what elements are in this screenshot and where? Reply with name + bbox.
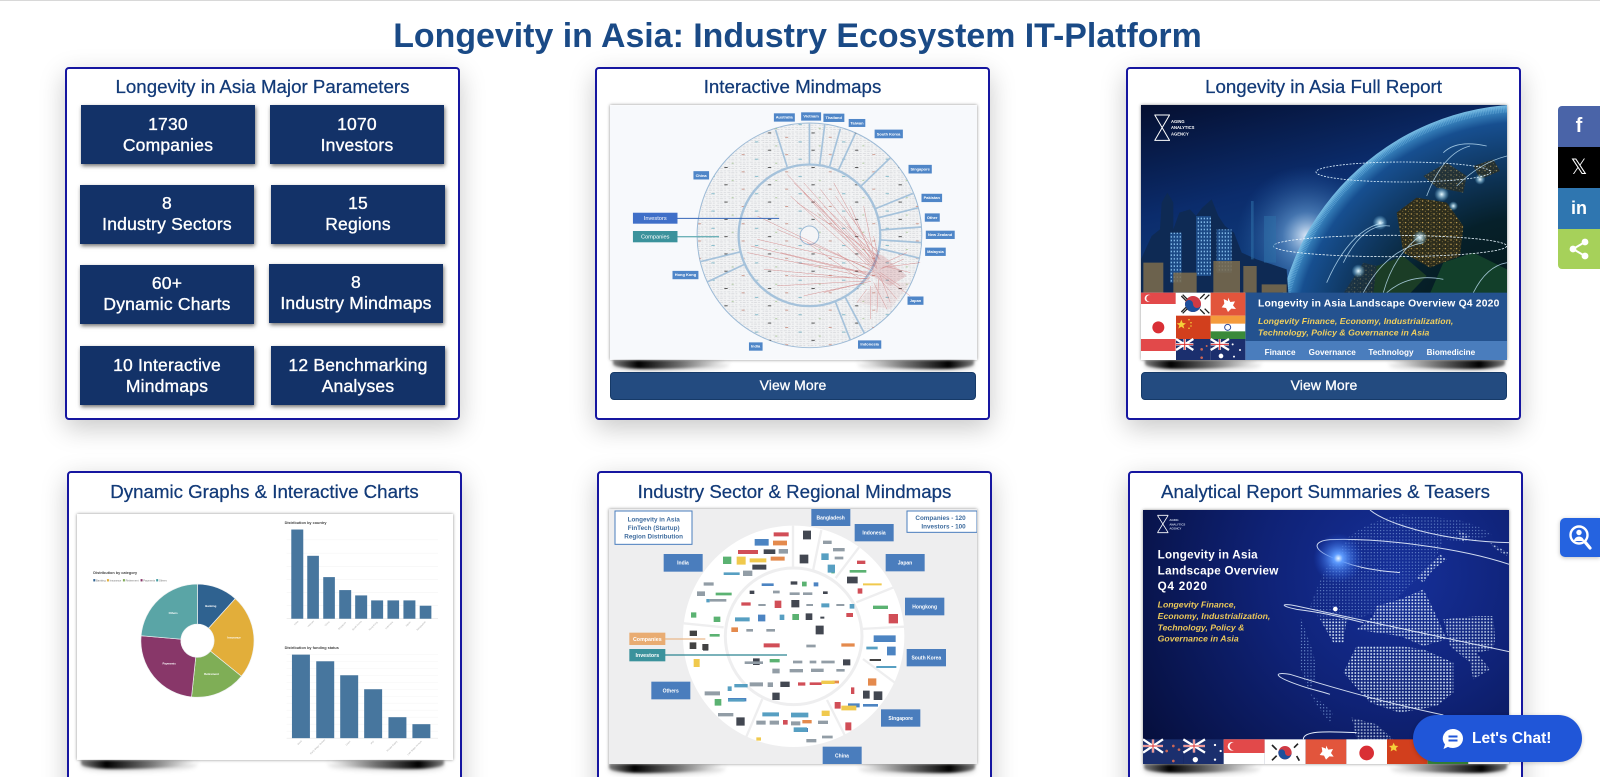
bar chart: distribution by funding status: Private Equity bbox=[386, 740, 399, 753]
region labels: Vietnam bbox=[803, 114, 819, 119]
report teaser image bbox=[1143, 510, 1509, 764]
stat tile: dynamic charts: 60+ bbox=[152, 273, 182, 293]
flags strip bbox=[1143, 739, 1509, 764]
donut chart: distribution by category: Banking bbox=[96, 578, 106, 582]
cover title: Landscape Overview bbox=[1158, 564, 1279, 577]
stat tile: dynamic charts bbox=[80, 265, 254, 324]
banner: report title: Governance bbox=[1309, 348, 1356, 357]
callout: investors: Investors bbox=[635, 653, 659, 659]
logo: Aging Analytics Agency: AGING bbox=[1171, 119, 1185, 124]
logo: Aging Analytics Agency: ANALYTICS bbox=[1169, 522, 1185, 526]
info box: region distribution: FinTech (Startup) bbox=[628, 525, 680, 532]
donut chart: distribution by category: Insurance bbox=[110, 578, 122, 582]
stat tile: benchmarking analyses: 12 Benchmarking bbox=[288, 355, 428, 375]
city skyline bbox=[1141, 193, 1288, 293]
cover subtitle: Longevity Finance, bbox=[1158, 600, 1236, 610]
stat tile: regions: Regions bbox=[325, 214, 391, 234]
panel: dynamic charts bbox=[67, 471, 462, 777]
stat tile: companies bbox=[81, 105, 255, 164]
logo: Aging Analytics Agency: AGENCY bbox=[1171, 131, 1189, 136]
banner: report title: Longevity in Asia Landscape Overview Q4 2020 bbox=[1258, 299, 1500, 310]
stat tile: companies: Companies bbox=[123, 135, 213, 155]
share button: generic share bbox=[1558, 229, 1600, 269]
stat tile: interactive mindmaps: Mindmaps bbox=[126, 376, 208, 396]
stat tile: regions: 15 bbox=[348, 193, 368, 213]
region labels: Pakistan bbox=[924, 195, 941, 200]
stat tile: interactive mindmaps: 10 Interactive bbox=[113, 355, 221, 375]
bar chart: distribution by country: Singapore bbox=[338, 621, 348, 631]
donut chart: distribution by category: Others bbox=[159, 578, 167, 582]
banner: report title: Finance bbox=[1265, 348, 1296, 357]
chat button bbox=[1413, 715, 1582, 762]
donut chart: distribution by category: Retirement bbox=[126, 578, 139, 582]
callout: companies: Companies bbox=[633, 637, 662, 643]
donut chart: distribution by category bbox=[93, 571, 254, 697]
region labels: Taiwan bbox=[850, 120, 864, 125]
region labels: Hongkong bbox=[912, 604, 937, 610]
cover subtitle: Technology, Policy & bbox=[1158, 622, 1244, 632]
bar chart: distribution by country: Hong Kong bbox=[369, 621, 379, 631]
info box: totals bbox=[907, 511, 977, 532]
leader lines bbox=[677, 218, 779, 237]
report cover image bbox=[1141, 105, 1507, 360]
network links bbox=[747, 174, 920, 319]
stat tile: investors: 1070 bbox=[337, 114, 377, 134]
panel: interactive mindmaps bbox=[595, 67, 990, 420]
heading: report summaries: Analytical Report Summaries & Teasers bbox=[1161, 481, 1490, 502]
bar chart: distribution by country: China bbox=[325, 621, 331, 627]
bar chart: distribution by country: Indonesia bbox=[385, 621, 394, 630]
bar chart: distribution by funding status: Seed bbox=[298, 740, 303, 746]
cover title bbox=[1158, 549, 1279, 593]
stat tile: investors: Investors bbox=[321, 135, 393, 155]
region labels: Thailand bbox=[826, 115, 842, 120]
region labels: South Korea bbox=[877, 131, 901, 136]
button: view more: View More bbox=[1291, 377, 1357, 393]
info box: region distribution: Region Distribution bbox=[624, 534, 683, 541]
accessibility search button bbox=[1560, 518, 1600, 557]
panel: major parameters bbox=[65, 67, 460, 420]
logo: Aging Analytics Agency: ANALYTICS bbox=[1171, 125, 1195, 130]
button: view more: View More bbox=[760, 377, 826, 393]
donut chart: distribution by category: Payments bbox=[163, 661, 176, 665]
stat tile: industry sectors bbox=[80, 185, 254, 244]
region labels: China bbox=[835, 753, 849, 759]
region labels: India bbox=[677, 561, 689, 567]
region labels: China bbox=[696, 173, 707, 178]
banner: report title bbox=[1245, 293, 1507, 360]
donut chart: distribution by category: Others bbox=[169, 611, 178, 615]
chat label: Let's Chat! bbox=[1472, 730, 1551, 747]
bar chart: distribution by country: Bangladesh bbox=[417, 621, 427, 631]
company and investor logos bbox=[690, 531, 898, 742]
bar chart: distribution by country: India bbox=[294, 621, 300, 626]
callout: companies: Companies bbox=[641, 234, 670, 240]
globe with city lights bbox=[1141, 105, 1507, 293]
stat tile: industry sectors: Industry Sectors bbox=[102, 214, 232, 234]
share button: X: 𝕏 bbox=[1571, 155, 1587, 179]
donut chart: distribution by category: Payments bbox=[143, 578, 156, 582]
region labels: Hong Kong bbox=[675, 272, 697, 277]
bar chart: distribution by funding status: Distribution by funding status bbox=[285, 646, 339, 650]
bar chart: distribution by country: Vietnam bbox=[307, 620, 315, 628]
region labels bbox=[651, 509, 946, 764]
region labels: Others bbox=[663, 688, 679, 694]
cover subtitle bbox=[1158, 600, 1270, 644]
share button: facebook: f bbox=[1576, 115, 1582, 137]
stat tile: benchmarking analyses bbox=[271, 346, 445, 405]
flags bbox=[1141, 293, 1245, 360]
button: view more bbox=[610, 372, 976, 400]
donut chart: distribution by category: Banking bbox=[205, 604, 217, 608]
bar chart: distribution by funding status: IPO bbox=[371, 741, 375, 745]
region labels: Australia bbox=[776, 115, 793, 120]
callout: investors bbox=[629, 649, 787, 661]
fintech mindmap image bbox=[609, 509, 977, 764]
stat tile: industry sectors: 8 bbox=[162, 193, 172, 213]
panel: sector and regional mindmaps bbox=[597, 471, 992, 777]
stat tile: industry mindmaps: 8 bbox=[351, 272, 361, 292]
region labels: Other bbox=[927, 215, 938, 220]
title: Longevity in Asia: Industry Ecosystem IT-Platform bbox=[393, 17, 1202, 55]
stat tile: regions bbox=[271, 185, 445, 244]
panel: full report bbox=[1126, 67, 1521, 420]
logo: Aging Analytics Agency: AGING bbox=[1169, 518, 1179, 522]
bar chart: distribution by funding status bbox=[285, 646, 438, 756]
region labels: Japan bbox=[910, 298, 922, 303]
bar chart: distribution by country bbox=[285, 521, 438, 631]
heading: major parameters: Longevity in Asia Major Parameters bbox=[116, 76, 409, 97]
stat tile: industry mindmaps bbox=[269, 264, 443, 323]
banner: report title: Technology, Policy & Governance in Asia bbox=[1258, 327, 1430, 337]
bar chart: distribution by funding status: Grant bbox=[345, 740, 352, 747]
stat tile: investors bbox=[270, 105, 444, 164]
dotted globe bbox=[1278, 510, 1509, 741]
info box: totals: Companies - 120 bbox=[915, 515, 966, 522]
stat tile: dynamic charts: Dynamic Charts bbox=[103, 294, 231, 314]
stat tile: interactive mindmaps bbox=[80, 346, 254, 405]
heading: sector and regional mindmaps: Industry Sector & Regional Mindmaps bbox=[638, 481, 951, 502]
bar chart: distribution by country: Japan bbox=[406, 621, 412, 627]
mindmap image bbox=[610, 105, 977, 360]
panel: report summaries and teasers bbox=[1128, 471, 1523, 777]
callout: investors: Investors bbox=[644, 216, 667, 222]
share button: X bbox=[1558, 147, 1600, 188]
bar chart: distribution by country: South Korea bbox=[351, 620, 363, 631]
banner: report title: Biomedicine bbox=[1427, 348, 1476, 357]
banner: report title: Technology bbox=[1368, 348, 1414, 357]
bar chart: distribution by funding status: Early Stage Venture bbox=[310, 738, 327, 755]
region labels: Indonesia bbox=[862, 531, 886, 537]
stat tile: industry mindmaps: Industry Mindmaps bbox=[280, 293, 432, 313]
region labels: New Zealand bbox=[928, 232, 953, 237]
cover title: Q4 2020 bbox=[1158, 580, 1207, 593]
region labels: India bbox=[751, 344, 761, 349]
orbit rings bbox=[1278, 510, 1509, 739]
heading: full report: Longevity in Asia Full Report bbox=[1205, 76, 1442, 97]
chart dashboard image bbox=[77, 514, 453, 760]
region labels: Singapore bbox=[910, 167, 931, 172]
info box: region distribution: Longevity in Asia bbox=[628, 517, 680, 524]
donut chart: distribution by category: Retirement bbox=[204, 672, 219, 676]
logo: Aging Analytics Agency: AGENCY bbox=[1169, 527, 1182, 531]
callout: investors bbox=[633, 213, 677, 224]
info box: region distribution bbox=[615, 511, 692, 544]
share button: linkedin: in bbox=[1571, 198, 1587, 218]
donut chart: distribution by category: Distribution by category bbox=[93, 571, 138, 575]
region labels: Bangladesh bbox=[816, 515, 845, 521]
region labels bbox=[672, 112, 955, 351]
stat tile: benchmarking analyses: Analyses bbox=[322, 376, 394, 396]
stat tile: companies: 1730 bbox=[148, 114, 188, 134]
heading: interactive mindmaps: Interactive Mindmaps bbox=[704, 76, 881, 97]
region labels: Indonesia bbox=[860, 342, 880, 347]
donut chart: distribution by category: Insurance bbox=[227, 635, 241, 639]
callout: companies bbox=[629, 633, 705, 645]
callout: companies bbox=[633, 231, 677, 242]
info box: totals: Investors - 100 bbox=[921, 523, 966, 530]
logo: Aging Analytics Agency bbox=[1157, 515, 1185, 533]
bar chart: distribution by funding status: Late Stage Venture bbox=[407, 740, 423, 756]
cover subtitle: Governance in Asia bbox=[1158, 634, 1239, 644]
button: view more bbox=[1141, 372, 1507, 400]
logo: Aging Analytics Agency bbox=[1154, 115, 1195, 140]
region labels: Singapore bbox=[888, 716, 913, 722]
radial logo wheel bbox=[683, 526, 905, 747]
region labels: Japan bbox=[898, 561, 912, 567]
region labels: Malaysia bbox=[927, 249, 945, 254]
cover subtitle: Economy, Industrialization, bbox=[1158, 611, 1270, 621]
ring: company and investor dots bbox=[697, 123, 922, 348]
banner: report title: Longevity Finance, Economy, Industrialization, bbox=[1258, 316, 1453, 326]
heading: dynamic charts: Dynamic Graphs & Interactive Charts bbox=[110, 481, 419, 502]
share button: facebook bbox=[1558, 106, 1600, 147]
cover title: Longevity in Asia bbox=[1158, 549, 1258, 562]
bar chart: distribution by country: Distribution by country bbox=[285, 521, 327, 525]
region labels: South Korea bbox=[911, 656, 941, 662]
share button: linkedin bbox=[1558, 188, 1600, 229]
icon: chat bubble bbox=[1442, 729, 1463, 749]
